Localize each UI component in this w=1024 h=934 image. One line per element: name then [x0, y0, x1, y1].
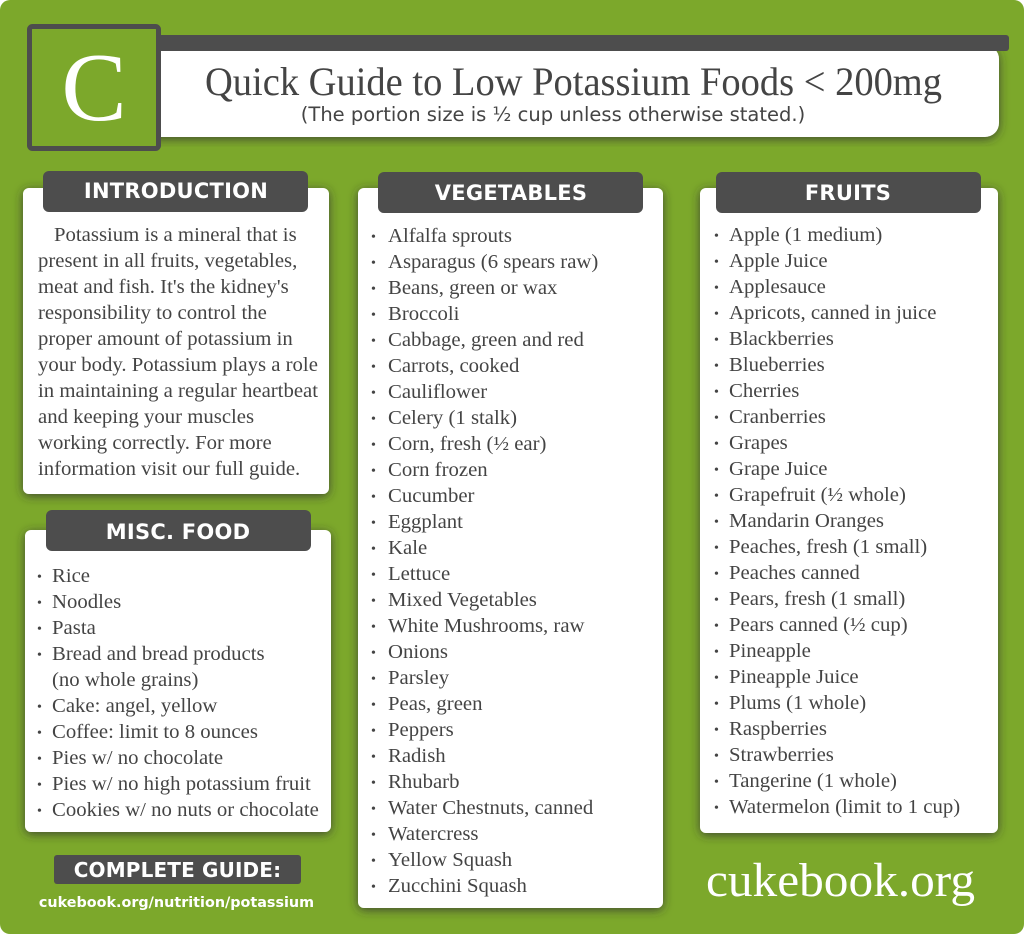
vegetables list: Water Chestnuts, canned — [388, 797, 593, 819]
vegetables list: • — [371, 308, 376, 323]
fruits list: • — [714, 515, 719, 530]
misc food list: • — [37, 726, 42, 741]
introduction text: Potassium is a mineral that is — [54, 224, 297, 246]
vegetables list: • — [371, 620, 376, 635]
title banner — [120, 35, 1009, 137]
heading: fruits: FRUITS — [805, 181, 891, 205]
fruits list: Watermelon (limit to 1 cup) — [729, 796, 960, 818]
fruits list: • — [714, 437, 719, 452]
vegetables list: Kale — [388, 537, 427, 559]
vegetables list: • — [371, 230, 376, 245]
misc food list: • — [37, 596, 42, 611]
misc food list: • — [37, 804, 42, 819]
vegetables list: • — [371, 542, 376, 557]
misc food list: • — [37, 648, 42, 663]
vegetables list: Beans, green or wax — [388, 277, 557, 299]
introduction text: and keeping your muscles — [38, 406, 254, 428]
fruits list: • — [714, 723, 719, 738]
vegetables list: Mixed Vegetables — [388, 589, 537, 611]
complete guide label: COMPLETE GUIDE: — [74, 858, 281, 882]
vegetables list: Eggplant — [388, 511, 463, 533]
fruits list: • — [714, 619, 719, 634]
vegetables list: Corn frozen — [388, 459, 488, 481]
misc food list: Pasta — [52, 617, 96, 639]
misc food list: Bread and bread products — [52, 643, 265, 665]
misc food list: Coffee: limit to 8 ounces — [52, 721, 258, 743]
fruits list — [714, 224, 960, 818]
fruits list: • — [714, 385, 719, 400]
fruits list: • — [714, 489, 719, 504]
fruits list: • — [714, 229, 719, 244]
introduction text: proper amount of potassium in — [38, 328, 293, 350]
fruits list: • — [714, 255, 719, 270]
fruits list: • — [714, 359, 719, 374]
vegetables list: • — [371, 854, 376, 869]
fruits list: • — [714, 801, 719, 816]
fruits list: • — [714, 671, 719, 686]
fruits list: • — [714, 281, 719, 296]
vegetables list: • — [371, 750, 376, 765]
fruits list: Raspberries — [729, 718, 827, 740]
misc food list: • — [37, 570, 42, 585]
fruits list: Apricots, canned in juice — [729, 302, 936, 324]
vegetables list: Rhubarb — [388, 771, 459, 793]
vegetables list: • — [371, 386, 376, 401]
fruits list: • — [714, 697, 719, 712]
vegetables list: • — [371, 802, 376, 817]
fruits list: • — [714, 749, 719, 764]
heading: introduction — [43, 171, 308, 212]
fruits list: Plums (1 whole) — [729, 692, 866, 714]
title: Quick Guide to Low Potassium Foods < 200mg — [205, 59, 942, 104]
fruits list: • — [714, 541, 719, 556]
vegetables list: Onions — [388, 641, 448, 663]
fruits list: Strawberries — [729, 744, 834, 766]
vegetables list: • — [371, 568, 376, 583]
vegetables list: • — [371, 360, 376, 375]
vegetables list: • — [371, 724, 376, 739]
vegetables list: • — [371, 334, 376, 349]
misc food list: Cookies w/ no nuts or chocolate — [52, 799, 319, 821]
introduction text: information visit our full guide. — [38, 458, 300, 480]
vegetables list: • — [371, 516, 376, 531]
introduction text: working correctly. For more — [38, 432, 272, 454]
vegetables list: Parsley — [388, 667, 450, 689]
vegetables list: Lettuce — [388, 563, 450, 585]
misc food list: (no whole grains) — [52, 669, 198, 691]
vegetables list: • — [371, 672, 376, 687]
panel: fruits — [700, 172, 998, 833]
vegetables list: • — [371, 594, 376, 609]
vegetables list: Cauliflower — [388, 381, 487, 403]
vegetables list: • — [371, 256, 376, 271]
complete guide label — [54, 855, 301, 884]
fruits list: Grape Juice — [729, 458, 828, 480]
vegetables list: Celery (1 stalk) — [388, 407, 517, 429]
introduction text: present in all fruits, vegetables, — [38, 250, 297, 272]
misc food list: Cake: angel, yellow — [52, 695, 218, 717]
vegetables list — [371, 225, 598, 897]
misc food list: • — [37, 752, 42, 767]
heading: introduction: INTRODUCTION — [84, 179, 268, 203]
vegetables list: White Mushrooms, raw — [388, 615, 585, 637]
vegetables list: • — [371, 880, 376, 895]
vegetables list: Radish — [388, 745, 446, 767]
panel: introduction — [23, 171, 329, 494]
heading: misc food — [46, 510, 311, 551]
misc food list: Pies w/ no chocolate — [52, 747, 223, 769]
fruits list: Pears, fresh (1 small) — [729, 588, 905, 610]
vegetables list: Broccoli — [388, 303, 460, 325]
fruits list: Grapes — [729, 432, 788, 454]
fruits list: Tangerine (1 whole) — [729, 770, 897, 792]
vegetables list: • — [371, 490, 376, 505]
misc food list: Pies w/ no high potassium fruit — [52, 773, 311, 795]
vegetables list: • — [371, 438, 376, 453]
heading: misc food: MISC. FOOD — [106, 520, 250, 544]
logo: letter C — [30, 26, 158, 148]
misc food list — [37, 565, 319, 821]
fruits list: Grapefruit (½ whole) — [729, 484, 906, 506]
heading: fruits — [716, 172, 981, 213]
introduction text: your body. Potassium plays a role — [38, 354, 318, 376]
misc food list: • — [37, 622, 42, 637]
fruits list: Pears canned (½ cup) — [729, 614, 908, 636]
vegetables list: Asparagus (6 spears raw) — [388, 251, 598, 273]
vegetables list: Zucchini Squash — [388, 875, 527, 897]
introduction text: meat and fish. It's the kidney's — [38, 276, 289, 298]
fruits list: • — [714, 593, 719, 608]
vegetables list: • — [371, 412, 376, 427]
complete guide url: cukebook.org/nutrition/potassium — [39, 895, 314, 911]
logo: letter C: C — [61, 34, 127, 142]
vegetables list: Yellow Squash — [388, 849, 512, 871]
introduction text — [38, 224, 318, 480]
heading: vegetables — [378, 172, 643, 213]
vegetables list: • — [371, 282, 376, 297]
fruits list: • — [714, 333, 719, 348]
vegetables list: Peppers — [388, 719, 454, 741]
fruits list: • — [714, 645, 719, 660]
fruits list: Cranberries — [729, 406, 826, 428]
fruits list: • — [714, 307, 719, 322]
fruits list: Blackberries — [729, 328, 834, 350]
subtitle: (The portion size is ½ cup unless otherwise stated.) — [301, 103, 805, 126]
introduction text: in maintaining a regular heartbeat — [38, 380, 318, 402]
vegetables list: Corn, fresh (½ ear) — [388, 433, 546, 455]
vegetables list: • — [371, 698, 376, 713]
vegetables list: • — [371, 828, 376, 843]
fruits list: Apple (1 medium) — [729, 224, 882, 246]
panel: vegetables — [358, 172, 663, 908]
vegetables list: Cabbage, green and red — [388, 329, 584, 351]
introduction text: responsibility to control the — [38, 302, 267, 324]
fruits list: • — [714, 775, 719, 790]
vegetables list: Peas, green — [388, 693, 483, 715]
vegetables list: Cucumber — [388, 485, 475, 507]
fruits list: Blueberries — [729, 354, 825, 376]
misc food list: Noodles — [52, 591, 121, 613]
site name: cukebook.org — [706, 855, 975, 907]
misc food list: Rice — [52, 565, 90, 587]
fruits list: Cherries — [729, 380, 799, 402]
vegetables list: Carrots, cooked — [388, 355, 519, 377]
misc food list: • — [37, 700, 42, 715]
fruits list: • — [714, 411, 719, 426]
misc food list: • — [37, 778, 42, 793]
vegetables list: • — [371, 776, 376, 791]
vegetables list: Alfalfa sprouts — [388, 225, 512, 247]
fruits list: Apple Juice — [729, 250, 828, 272]
fruits list: Mandarin Oranges — [729, 510, 884, 532]
vegetables list: Watercress — [388, 823, 479, 845]
fruits list: Peaches, fresh (1 small) — [729, 536, 927, 558]
heading: vegetables: VEGETABLES — [435, 181, 587, 205]
fruits list: Pineapple — [729, 640, 811, 662]
vegetables list: • — [371, 646, 376, 661]
fruits list: Applesauce — [729, 276, 826, 298]
fruits list: Pineapple Juice — [729, 666, 859, 688]
fruits list: • — [714, 463, 719, 478]
fruits list: Peaches canned — [729, 562, 860, 584]
panel: misc food — [25, 510, 331, 832]
vegetables list: • — [371, 464, 376, 479]
fruits list: • — [714, 567, 719, 582]
